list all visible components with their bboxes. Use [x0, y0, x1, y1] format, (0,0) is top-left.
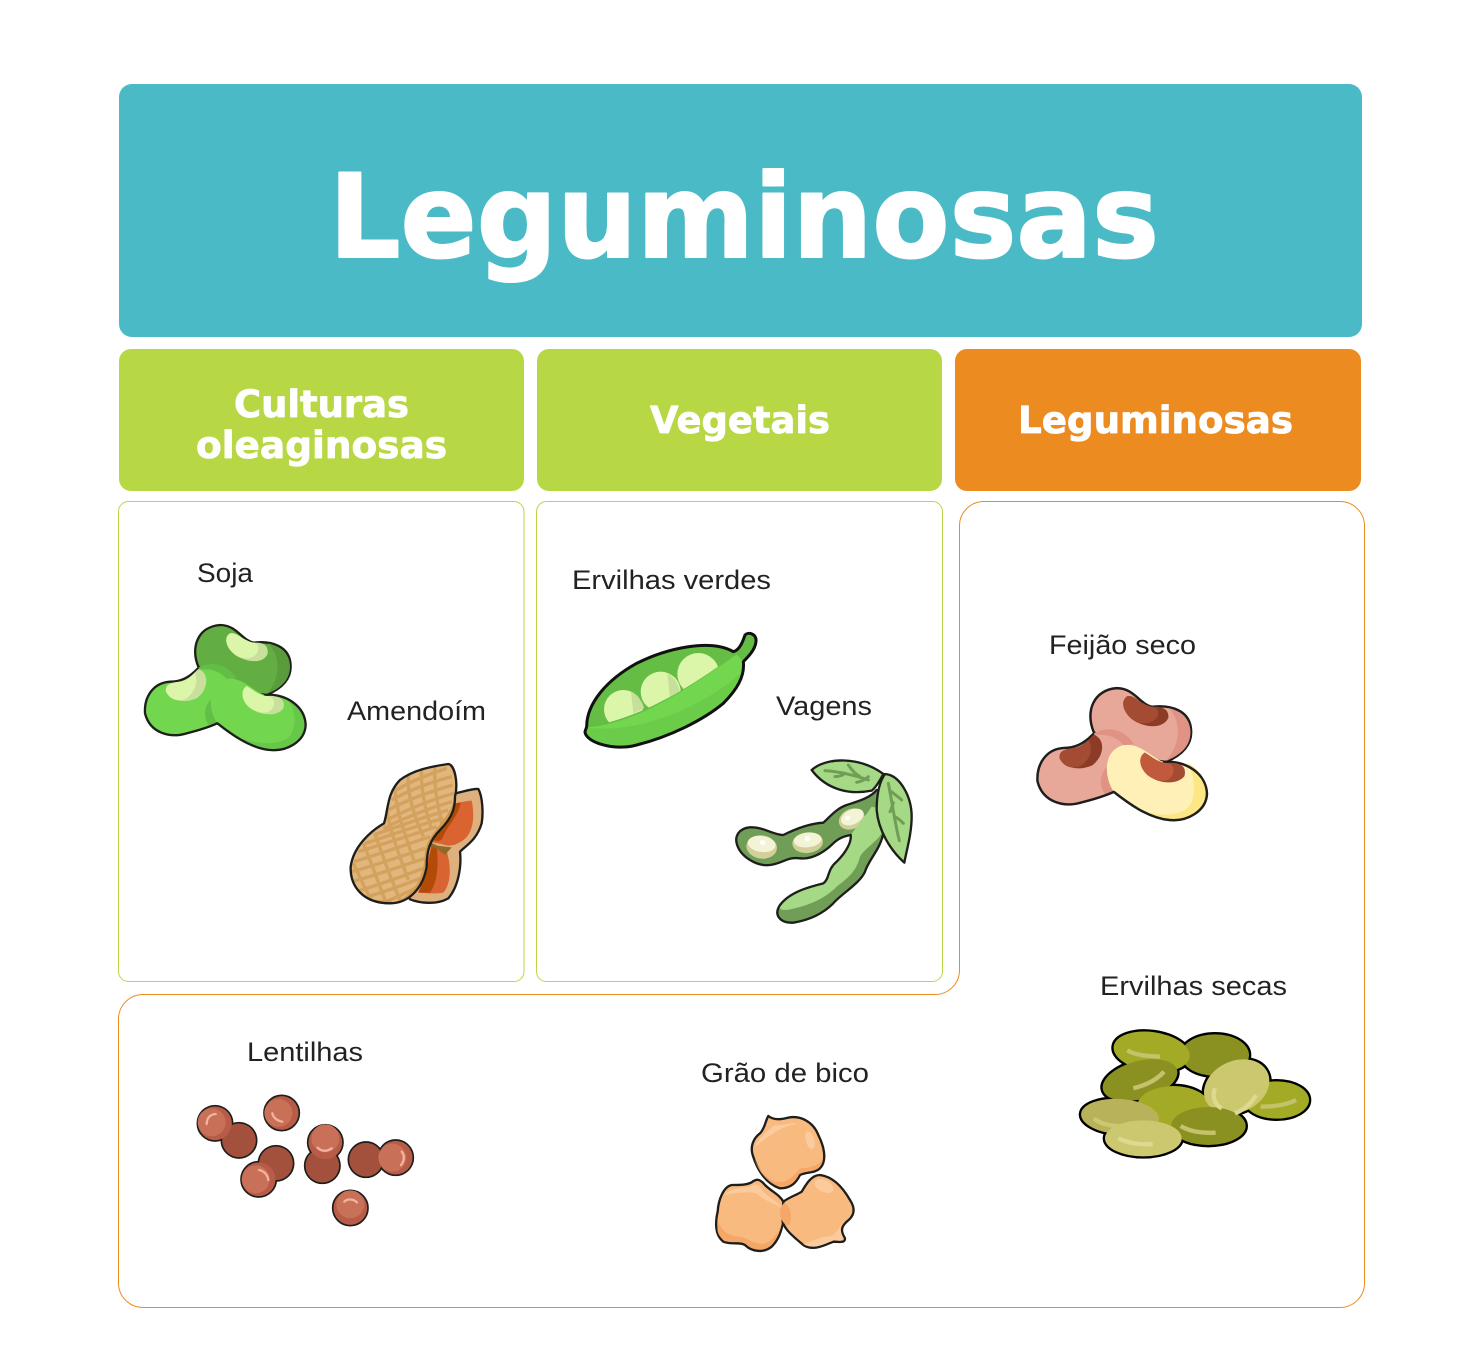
label: Ervilhas secas: Ervilhas secas: [1100, 971, 1287, 1001]
label: Soja: Soja: [197, 558, 254, 588]
heading: Vegetais: Vegetais: [650, 399, 830, 442]
icon: dried peas: [1080, 1027, 1309, 1156]
panel: culturas oleaginosas: [118, 502, 524, 982]
icon: lentils: [198, 1096, 412, 1225]
heading: Culturas oleaginosas: Culturas: [234, 383, 409, 426]
title banner: [119, 84, 1362, 337]
panel: vegetais: [536, 502, 942, 982]
label: Lentilhas: Lentilhas: [247, 1037, 363, 1067]
icon: peanut: [350, 760, 483, 910]
label: Amendoim: Amendoím: [347, 696, 486, 726]
label: Ervilhas verdes: Ervilhas verdes: [572, 565, 771, 595]
label: Feijao seco: Feijão seco: [1049, 630, 1196, 660]
panel: leguminosas outline: [118, 501, 1364, 1308]
icon: green pea pod: [585, 633, 756, 747]
label: Grao de bico: Grão de bico: [701, 1058, 869, 1088]
icon: soybeans: [145, 625, 306, 750]
label: Vagens: Vagens: [776, 691, 872, 721]
heading: Leguminosas: Leguminosas: [1018, 399, 1293, 442]
title: Leguminosas: [329, 150, 1159, 285]
heading: Culturas oleaginosas: oleaginosas: [196, 424, 447, 467]
heading: Culturas oleaginosas: [119, 349, 524, 491]
icon: soybean pods: [736, 760, 912, 923]
icon: dry beans: [1037, 688, 1207, 820]
heading: Vegetais: [537, 349, 942, 491]
icon: chickpeas: [716, 1116, 854, 1251]
heading: Leguminosas: [955, 349, 1361, 491]
